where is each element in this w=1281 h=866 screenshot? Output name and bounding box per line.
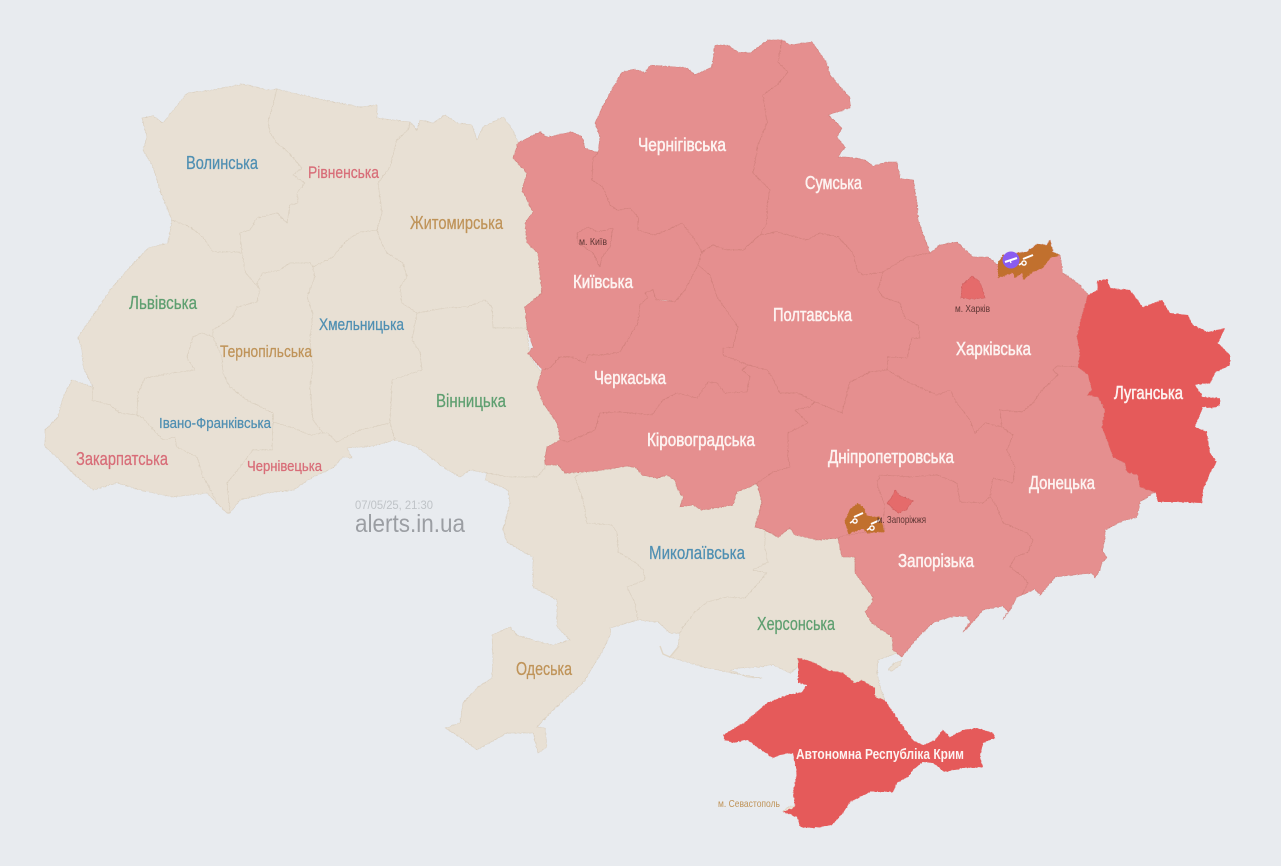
label: Ivano-Frankivsk: Івано-Франківська bbox=[159, 415, 272, 432]
region: Kirovohrad bbox=[545, 365, 815, 510]
region: Lviv bbox=[78, 220, 260, 415]
label: Kyiv oblast: Київська bbox=[573, 272, 634, 292]
region: Chernihiv bbox=[592, 40, 788, 252]
region: Ternopil bbox=[213, 263, 323, 435]
label: Kirovohrad: Кіровоградська bbox=[647, 430, 756, 450]
region: Zakarpattia bbox=[45, 380, 227, 513]
label: Kharkiv city: м. Харків bbox=[955, 303, 990, 315]
label: Sumy: Сумська bbox=[805, 173, 863, 193]
region: Sevastopol bbox=[783, 806, 796, 813]
region: Zaporizhzhia oblast bbox=[838, 475, 1033, 657]
label: Luhansk: Луганська bbox=[1114, 383, 1184, 403]
region: Mykolaiv bbox=[575, 466, 768, 633]
region: Volyn bbox=[142, 84, 305, 253]
region: Zaporizhzhia artillery zone bbox=[845, 503, 885, 534]
label: Donetsk: Донецька bbox=[1029, 473, 1096, 493]
icon: artillery Nikopol bbox=[850, 513, 863, 523]
watermark: alerts.in.ua bbox=[355, 510, 465, 538]
region: Kyiv city bbox=[577, 227, 613, 267]
region: Zhytomyr bbox=[377, 115, 542, 328]
label: Khmelnytskyi: Хмельницька bbox=[319, 316, 405, 334]
region: Crimea bbox=[723, 658, 995, 828]
label: Lviv: Львівська bbox=[129, 293, 198, 313]
label: Zakarpattia: Закарпатська bbox=[76, 449, 169, 469]
label: Odesa: Одеська bbox=[516, 659, 573, 679]
icon: artillery Kharkiv bbox=[1019, 255, 1033, 265]
label: Volyn: Волинська bbox=[186, 153, 259, 173]
region: Zaporizhzhia city bbox=[887, 490, 913, 513]
label: Crimea: Автономна Республіка Крим bbox=[796, 747, 964, 763]
label: Rivne: Рівненська bbox=[308, 163, 379, 182]
label: Poltava: Полтавська bbox=[773, 305, 853, 325]
regions with full red status bbox=[723, 240, 1230, 828]
region: Ivano-Frankivsk bbox=[137, 333, 273, 513]
region: Arabat spit bbox=[888, 660, 902, 671]
region: Chernivtsi bbox=[227, 422, 395, 513]
label: Kharkiv: Харківська bbox=[956, 339, 1032, 359]
labels: oblast names bbox=[76, 135, 1184, 810]
regions with air alert bbox=[513, 40, 1155, 657]
region: Donetsk bbox=[990, 366, 1155, 595]
region: Vinnytsia bbox=[390, 300, 560, 477]
region: Kharkiv city bbox=[961, 276, 985, 299]
region: Khmelnytskyi bbox=[307, 230, 422, 442]
icon: drone threat on purple circle bbox=[1002, 252, 1020, 268]
region: Odesa bbox=[445, 465, 645, 753]
label: Chernihiv: Чернігівська bbox=[638, 135, 727, 155]
region: Rivne bbox=[240, 89, 410, 290]
label: Kherson: Херсонська bbox=[757, 614, 836, 634]
region: Kyiv oblast bbox=[513, 132, 702, 370]
label: Mykolaiv: Миколаївська bbox=[649, 543, 746, 563]
label: Sevastopol: м. Севастополь bbox=[718, 798, 780, 810]
label: Zhytomyr: Житомирська bbox=[410, 213, 504, 233]
label: Zaporizhzhia city: м. Запоріжжя bbox=[877, 514, 926, 526]
region: Dnipropetrovsk bbox=[755, 370, 1015, 540]
region: Luhansk bbox=[1077, 279, 1230, 503]
label: Vinnytsia: Вінницька bbox=[436, 391, 507, 411]
label: Dnipropetrovsk: Дніпропетровська bbox=[828, 447, 955, 467]
region: Kherson bbox=[670, 528, 902, 700]
region: Poltava bbox=[698, 232, 920, 413]
icon: artillery Marhanets bbox=[867, 520, 880, 530]
Kinburn spit bbox=[660, 646, 679, 657]
label: Kyiv city: м. Київ bbox=[579, 236, 607, 248]
label: Ternopil: Тернопільська bbox=[220, 342, 312, 361]
label: Chernivtsi: Чернівецька bbox=[247, 458, 323, 475]
region: Cherkasy bbox=[537, 265, 750, 442]
regions without alert bbox=[45, 84, 902, 813]
region: Sumy bbox=[753, 40, 930, 275]
label: Zaporizhzhia: Запорізька bbox=[898, 551, 975, 571]
label: Cherkasy: Черкаська bbox=[594, 368, 667, 388]
region: Kharkiv oblast bbox=[878, 240, 1088, 433]
timestamp: 07/05/25, 21:30 bbox=[355, 498, 433, 512]
region: northern Kharkiv artillery zone bbox=[998, 240, 1060, 280]
